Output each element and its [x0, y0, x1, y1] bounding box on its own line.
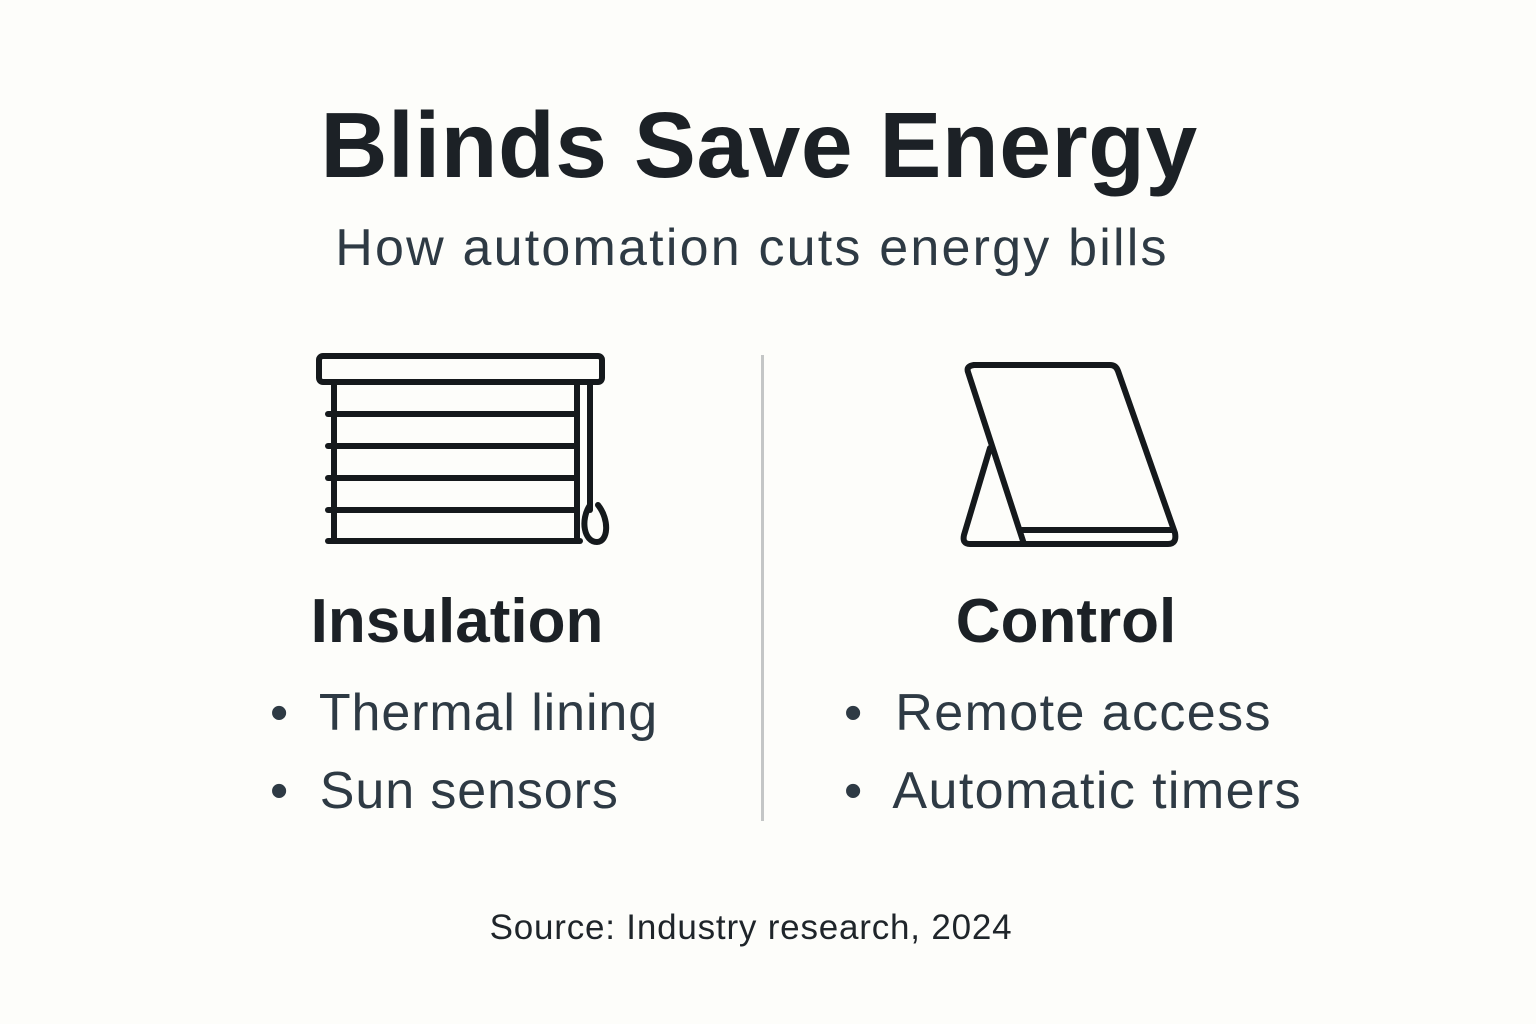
subtitle: How automation cuts energy bills: [335, 219, 1169, 277]
bullet list: insulation: • Thermal lining: [270, 684, 658, 742]
heading: insulation: Insulation: [311, 587, 603, 656]
panel: control: [844, 587, 1302, 820]
bullet list: control: • Automatic timers: [844, 762, 1302, 820]
bullet list: control: [844, 684, 1302, 820]
panel: insulation: [270, 587, 658, 820]
title: Blinds Save Energy: [320, 93, 1198, 197]
heading: control: Control: [956, 587, 1176, 656]
source: Source: Industry research, 2024: [490, 908, 1012, 947]
bullet list: insulation: [270, 684, 658, 820]
bullet list: insulation: • Sun sensors: [270, 762, 619, 820]
divider: [761, 355, 764, 821]
bullet list: control: • Remote access: [844, 684, 1272, 742]
